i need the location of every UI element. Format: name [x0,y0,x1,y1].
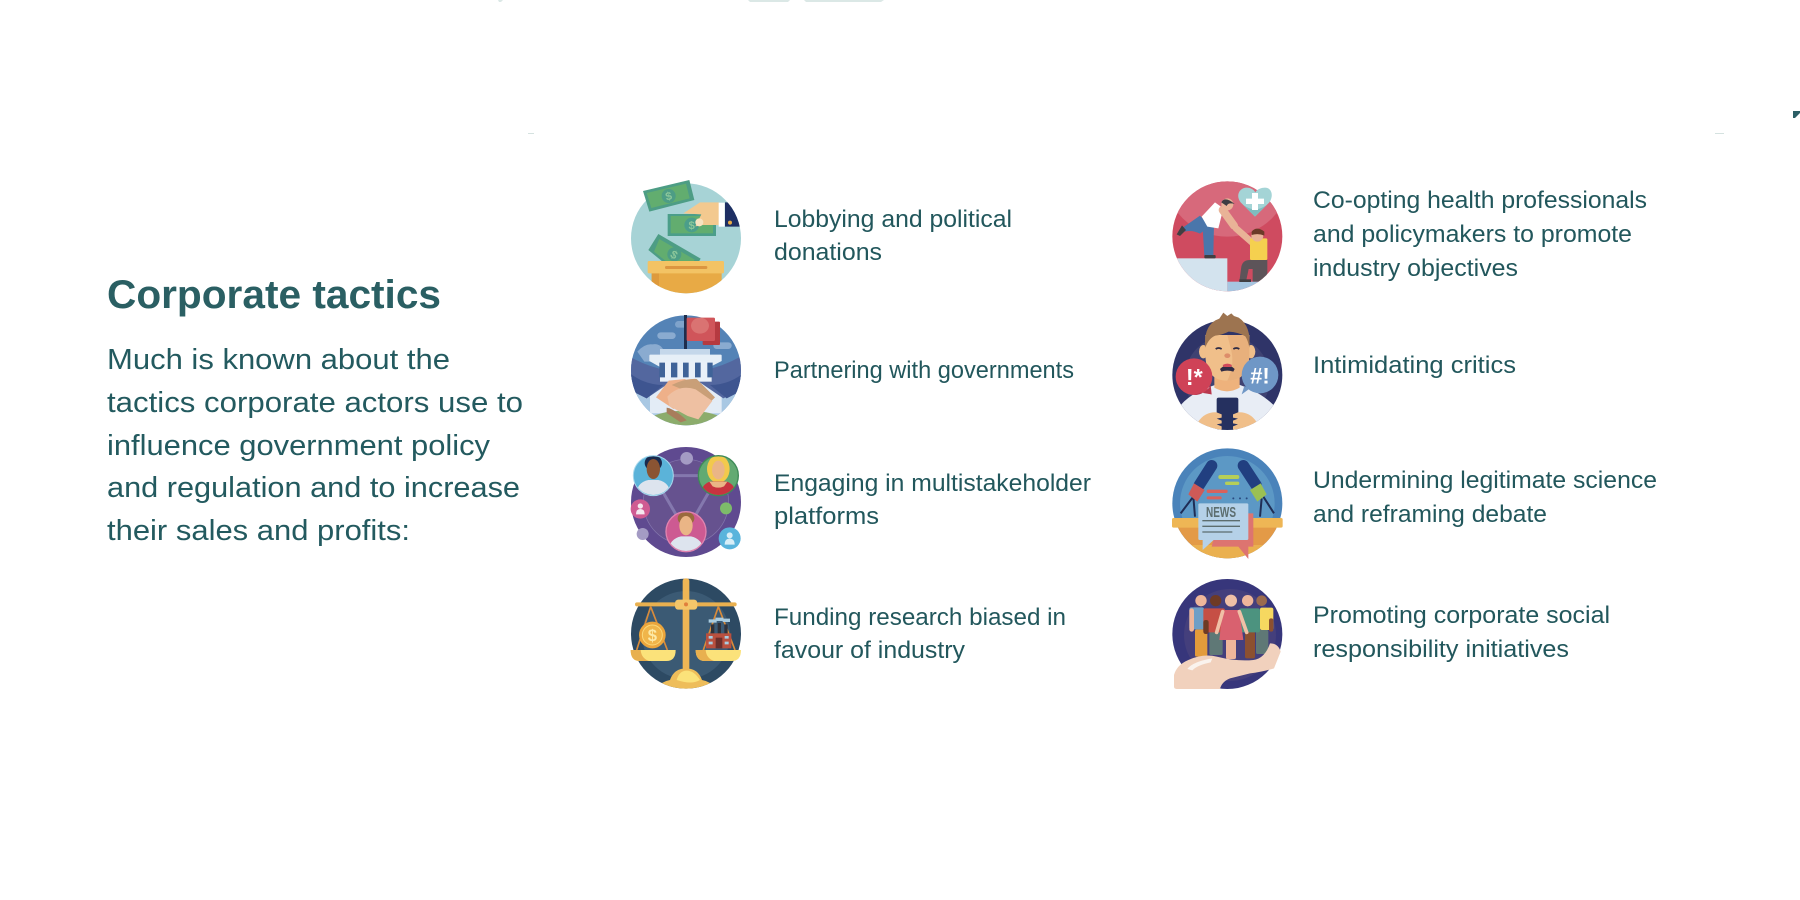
icon: money into box (lobbying): $ [664,190,674,204]
icon: news and microphones: NEWS [1206,505,1236,521]
intro text block: tactics corporate actors use to [107,387,523,419]
intro text block: their sales and profits: [107,515,410,547]
icon: co-opting professionals climbing [1172,181,1282,292]
label: multistakeholder: platforms [774,503,879,530]
label: funding research [774,604,1066,664]
label: undermining science: and reframing debate [1313,501,1547,528]
intro text block: and regulation and to increase [107,472,520,504]
label: undermining science: Undermining legitimate science [1313,467,1657,494]
icon: intimidated person with phone [1172,313,1282,432]
label: funding research: Funding research biased in [774,604,1066,631]
label: co-opting [1313,187,1647,282]
label: funding research: favour of industry [774,637,965,664]
label: lobbying [774,206,1012,266]
icon: news and microphones [1170,448,1287,562]
icon: money into box (lobbying) [631,180,742,295]
label: co-opting: and policymakers to promote [1313,221,1632,248]
icon: handshake and government building [631,315,741,426]
label: lobbying: donations [774,239,882,266]
label: co-opting: Co-opting health professionals [1313,187,1647,214]
icon: scales with coin and factory [631,578,741,692]
intro text block: influence government policy [107,430,491,462]
icon: multistakeholder network [631,447,741,557]
label: partnering: Partnering with governments [774,357,1074,384]
infographic canvas [107,0,1800,689]
icon: money into box (lobbying): $ [689,220,696,232]
icon: scales with coin and factory: $ [648,626,658,645]
icon: people in a hand [1172,579,1282,689]
label: lobbying: Lobbying and political [774,206,1012,233]
icon: intimidated person with phone: !* [1186,364,1204,390]
label: CSR initiatives: Promoting corporate social [1313,602,1610,629]
intro text block: Much is known about the [107,344,450,376]
label: co-opting: industry objectives [1313,255,1518,282]
label: intimidating: Intimidating critics [1313,352,1516,379]
label: multistakeholder [774,470,1091,530]
label: CSR initiatives [1313,602,1610,663]
label: CSR initiatives: responsibility initiatives [1313,636,1569,663]
title: Corporate tactics [107,273,441,317]
label: undermining science [1313,467,1657,528]
intro text block [107,344,523,547]
label: multistakeholder: Engaging in multistakeholder [774,470,1091,497]
icon: money into box (lobbying): $ [668,249,680,263]
icon: intimidated person with phone: #! [1250,363,1270,388]
